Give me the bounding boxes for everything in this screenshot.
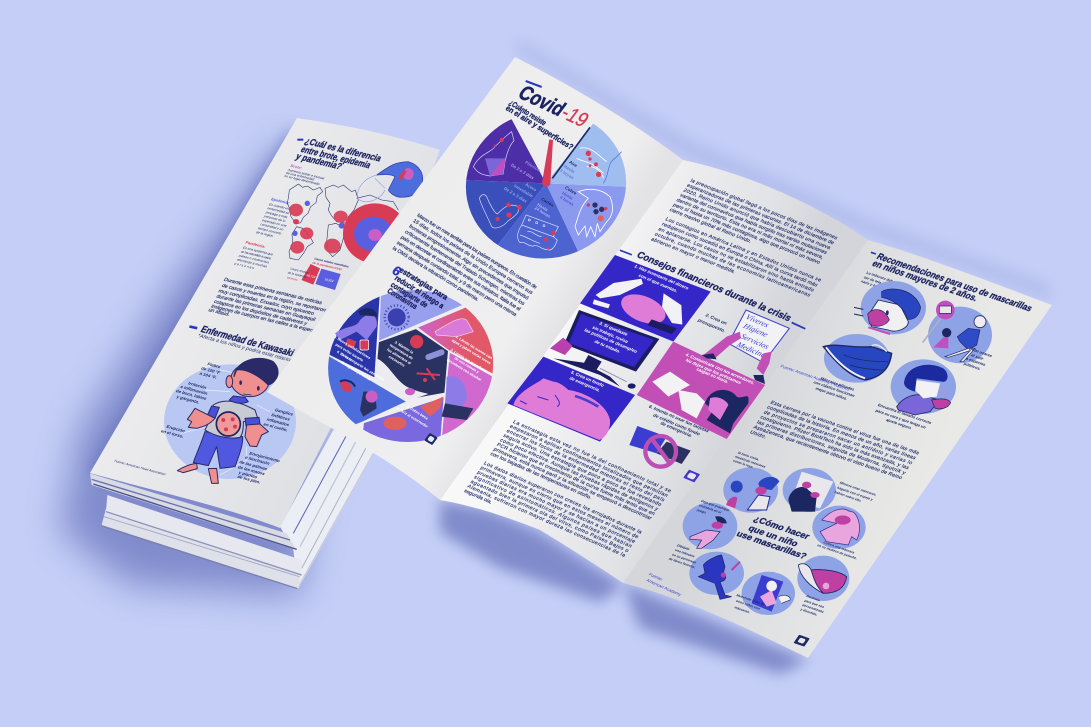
callout labels: y garganta. [176, 394, 200, 405]
subtitle: ¿Cuánto resiste [507, 98, 548, 128]
title bar [525, 80, 542, 88]
heading: que un niño [746, 523, 801, 548]
definitions: países o continentes [238, 254, 270, 264]
iris labels: 5. Cubre boca [406, 405, 430, 421]
caption: Coloca una máscara [822, 541, 855, 554]
bar chart [286, 257, 350, 290]
pie labels [503, 160, 579, 219]
pie labels: Acero [524, 182, 538, 193]
cell 4: 4. Comunícate con tus acreedores. [685, 352, 756, 385]
caption: Debe usarse [968, 346, 994, 358]
stack top pack [90, 473, 297, 550]
heading [735, 514, 812, 561]
panel: how to use masks [668, 451, 877, 647]
heading bar [297, 139, 303, 141]
source: Fuente: [648, 572, 664, 582]
text block: La estrategia esta vez no fue la del confinamiento total y se [512, 419, 672, 494]
text block: aguantado bien la primera ola del virus, como Países Bajos o [469, 479, 630, 554]
icon: child with mask [854, 281, 926, 334]
cell 6: 6. Intenta no usar tus tarjetas [648, 404, 711, 434]
text block [489, 419, 673, 526]
panel 3 text: consiguieron. Pfizer/ BioNTech ha sido la más avanzada, y las [759, 415, 911, 471]
caption: juego. [695, 508, 708, 515]
icon: hand with phone [442, 376, 473, 420]
caption: como la tuya. [732, 459, 755, 469]
cell 1 [580, 255, 711, 342]
subtitle: en el aire y superficies? [504, 104, 575, 151]
cell 2: presupuesto. [697, 318, 727, 333]
cell 2: Víveres [744, 313, 771, 329]
strategies heading: contagiarte de [389, 280, 430, 310]
cell 3: de tu estado. [593, 339, 622, 354]
panel 3 text: las primeras distribuciones, seguida de Moderna, Sputnik y [755, 420, 907, 476]
heading: ¿Cuál es la diferencia [302, 136, 384, 164]
caption: háganlo con el espejo y [836, 486, 874, 501]
caption: ser de tela y cubrir [863, 276, 896, 290]
pie labels: Hasta [561, 190, 575, 201]
icon: decorated mask [797, 556, 849, 601]
caption: máscaras. [733, 606, 751, 614]
iris labels: agua y jabón varias veces [451, 338, 492, 365]
iris labels: 4. Evita compartir tus utensilios [336, 350, 385, 382]
callout labels: de los pies. [236, 474, 262, 485]
callout labels: a 104 °F. [199, 371, 218, 380]
iris labels: 2. Limpia tus superficies [450, 348, 488, 374]
text block [207, 277, 327, 334]
cell 3 [550, 310, 659, 389]
definitions: comunidad y un [259, 222, 284, 231]
text block: como poco efectiva. Aunque las pruebas rápidas de antígenos y [498, 438, 660, 513]
strategies heading: reducir el riesgo a [393, 274, 446, 310]
caption: Mírense unas máscaras, [839, 481, 877, 497]
cell 2: Higiene [741, 321, 770, 339]
caption: una máscara [674, 548, 696, 558]
caption: nariz y boca [860, 280, 883, 290]
bar chart: Muertes [286, 276, 299, 282]
cell 5: 5. Crea un fondo [570, 370, 606, 388]
text block: la preocupación global llegó a los pocos días de las imágenes [689, 178, 839, 241]
definitions: esperado en una [261, 218, 288, 228]
icon: blue mask [823, 334, 892, 383]
stack of brochures [90, 430, 375, 589]
icon: girl fitting mask [891, 359, 956, 415]
icon: adult and child [923, 301, 992, 363]
subheading: *Afecta a los niños y podría estar relacionada [196, 333, 303, 366]
text block: pero sí hasta un 70% más contagiosa, algo que provocó un nuevo [671, 202, 821, 266]
caption: de libros favorito. [668, 557, 696, 569]
heading: Enfermedad de Kawasaki [198, 325, 296, 359]
text block: primavera, aunque es cierto que en estos meses el número de [479, 465, 640, 540]
callout labels: Fiebre [207, 362, 222, 369]
cell 2 [697, 310, 789, 384]
heading [293, 136, 384, 172]
heading: Recomendaciones para uso de mascarillas [874, 252, 1034, 314]
caption: para que sea [803, 599, 825, 609]
iris labels: desinfecta con alcohol [446, 358, 482, 382]
caption: Si tiene visita, [737, 451, 760, 461]
text block [668, 178, 839, 271]
caption: para su cara y que tenga un [875, 408, 928, 430]
text block: Durante esas primeras semanas de noticias [222, 277, 324, 306]
icon: child with mask sitting [683, 503, 737, 549]
caption [799, 594, 825, 617]
pointer [542, 139, 553, 187]
heading: ¿Cómo hacer [752, 514, 812, 541]
definitions: personas [233, 262, 255, 270]
callout labels: Erupción [165, 424, 186, 433]
body text: Marzo fue un mes terrible para los países europeos. En cuestión de [415, 213, 538, 291]
text block: octubre, cuando muchas de las economías latinoamericanas [653, 232, 812, 299]
rash [216, 412, 240, 436]
caption [668, 499, 731, 569]
text block: PCR hicieron que el crecimiento de la curva fuese más lento que en [495, 442, 656, 517]
caption: muéstrale máscaras [734, 455, 767, 469]
text block: colapsos en los depósitos de cadáveres y [212, 299, 309, 327]
text block: cierre masivo global al Reino Unido. [668, 207, 753, 245]
definitions: de una enfermedad [285, 171, 315, 181]
pie labels: 24 horas [533, 205, 552, 219]
icon: steel arm [479, 195, 522, 228]
title: Covid [514, 81, 570, 121]
text block: con los bajadas de las temperaturas en otoño. [489, 451, 593, 501]
pie labels: Hasta [563, 164, 576, 174]
callout labels: Irritación [187, 381, 208, 390]
heading: entre brote, epidemia [298, 145, 373, 171]
cell 4 [637, 342, 765, 439]
panel 3 text [748, 400, 921, 486]
source: Fuente: American Academy Pediatrics [779, 364, 851, 391]
world map [287, 184, 398, 260]
callout labels: de 100 °F [200, 366, 222, 375]
text block: empezaron a aplicar confinamientos localizados que permitían [508, 424, 669, 499]
map circles [289, 201, 407, 263]
cell 2: Medicinas [734, 340, 771, 361]
icon: person and mask [340, 380, 443, 430]
callout labels: y plantas [238, 470, 259, 479]
icon: copper hand [575, 189, 613, 237]
bar chart: de la pandemia H1N1 [311, 261, 343, 271]
icon: person with tissue [358, 162, 423, 202]
cell 2: Servicios [739, 332, 771, 351]
cell 6 [629, 404, 711, 467]
pie chart [466, 119, 626, 258]
iris labels: la cara [340, 353, 354, 362]
icon: woman [335, 308, 377, 350]
pie labels: 4 horas [559, 195, 575, 207]
heading: en niños mayores de 2 años. [870, 259, 980, 304]
icon: washing hands [435, 319, 473, 337]
heading [870, 252, 1034, 314]
strategies heading: 6 [389, 263, 404, 279]
body text: fronteras progresivamente. Algo sin precedentes que impulsó [407, 224, 530, 302]
callout labels: Ganglios [274, 407, 295, 417]
heading bar [189, 325, 198, 329]
definitions: de la región [255, 230, 274, 238]
iris labels: para evitar tocarte [335, 343, 364, 362]
body text [391, 213, 538, 324]
definitions [233, 163, 325, 270]
callout labels: en el torso. [160, 429, 185, 439]
text block: Los contagios en América Latina y en Estados Unidos nunca se [664, 217, 822, 283]
cell 6: de emergencia. [659, 421, 694, 438]
bar chart: Casos totales [289, 267, 310, 275]
heading bars [620, 249, 632, 256]
caption: en su muñeco de peluche. [816, 543, 858, 560]
cell 1: con el que cuentas. [638, 273, 679, 293]
pie labels: Plástico [524, 160, 541, 173]
definitions: Pandemia: [244, 240, 267, 249]
cell 3: las políticas de desempleo [583, 328, 639, 354]
icon: photo of child [742, 572, 795, 615]
iris labels: 6. Busca señalizaciones [333, 335, 371, 360]
caption: mejor para niños. [814, 386, 849, 401]
definitions: se ha extendido a varios [240, 250, 272, 260]
source: Fuente: American Heart Association [113, 459, 167, 476]
caption: usándola en el [698, 504, 722, 514]
text block: variante del coronavirus que había surgido tras varias mutaciones [678, 193, 829, 256]
back sheet [90, 118, 440, 528]
cell 2: 2. Crea un [704, 313, 728, 326]
caption: en su personaje [671, 553, 697, 564]
title number: -19 [556, 101, 594, 131]
text block: abrieron en mayor o menor medida. [650, 237, 737, 275]
pie labels: Aire [568, 160, 579, 168]
text block [462, 461, 643, 563]
pie labels: 3 horas [559, 168, 575, 180]
panel 3 text: de proyectos se prepararon sacar un antídoto y varias lo [762, 410, 914, 466]
caption: Decórala [805, 594, 821, 602]
text block: redujeron como sucedió en Europa o China. Allí la curva tardó más [660, 222, 819, 288]
definitions: Brote: [289, 163, 303, 170]
leader lines [182, 370, 270, 475]
callout labels: de las manos [237, 465, 266, 476]
iris labels: 1. Lávate las manos con [455, 335, 493, 360]
panel: Kawasaki [113, 325, 303, 485]
caption: La máscara debe [865, 271, 896, 284]
logo [683, 470, 700, 482]
bar chart: 20,723 [305, 273, 317, 279]
caption: Muéstrale fotos de [736, 593, 766, 606]
caption: Encuentra el tamaño correcto [877, 403, 933, 425]
panel: right panel [623, 240, 1052, 658]
iris labels: cocinarlos [388, 355, 406, 368]
pie labels: Hasta [536, 202, 550, 213]
panel: brote epidemia pandemia [207, 136, 423, 334]
panel: left panel [267, 57, 683, 500]
callout labels: de boca, labios [175, 388, 208, 401]
callout labels: e hinchazón [244, 455, 271, 466]
iris centre light patch [375, 358, 428, 401]
text block: de casos y muertes en la región, se reportaron [220, 283, 327, 313]
text block: Los datos diarios superaron con creces los arrojados durante la [482, 461, 643, 536]
title block [504, 80, 594, 151]
body text: semana después contando total, y 9 de marzo pero una misma [395, 240, 518, 318]
icon: plastic bag [473, 132, 514, 176]
callout labels [160, 362, 295, 485]
text block: en aplanarse. Los casos no se estabilizaron sino hasta entrado [657, 227, 815, 293]
definitions: Es cuando una [268, 202, 292, 211]
caption: con clástico funcionan [812, 380, 857, 398]
iris labels: los alimentos al [386, 348, 412, 365]
bar chart: Casos totales mundiales [313, 257, 350, 269]
pie wedges [466, 119, 626, 258]
panel: financial tips [507, 249, 806, 467]
caption: Dibújale [676, 544, 691, 551]
panel 3 text: Esta carrera por la vacuna contra el virus fue una de las más [769, 400, 921, 456]
iris labels: y nariz al estornudar [396, 407, 429, 429]
definitions: Epidemia: [270, 197, 291, 205]
text block: seguía activo. Una estrategia que poco a poco se fue revelando [502, 433, 663, 508]
iris labels: 3. Mantén la [394, 340, 415, 355]
cell 4: No dejes que los préstamos [685, 358, 743, 385]
iris labels: de higiene personal [340, 360, 371, 381]
definitions: propaga a más [265, 210, 289, 219]
text block: esperanzadoras de las primeras vacunas. El 14 de diciembre de [685, 183, 835, 246]
text block: significativo de asintomáticos. Algunos países que habían [472, 475, 633, 549]
definitions: tiempo concreto [257, 226, 282, 235]
icon: two people [723, 467, 779, 513]
panel 3 text: AstraZeneca, que recientemente obtuvo el visto bueno de Reino [752, 425, 903, 481]
definitions: afectando a muchas [236, 258, 268, 268]
callout labels: e inflamación [179, 384, 209, 396]
caption: Deja que practique [700, 499, 731, 512]
source: American Academy [645, 578, 683, 597]
definitions: Es una epidemia que [242, 246, 274, 256]
iris labels: temperatura de [389, 343, 414, 360]
icon: thermometer and syringe [405, 335, 445, 395]
caption [733, 593, 766, 614]
panel 2 top text [650, 178, 839, 304]
boy illustration [177, 358, 278, 483]
iris labels [333, 335, 493, 429]
text block: durante las primeras semanas en Guayaquil [215, 294, 316, 323]
panel: middle panel [440, 160, 868, 583]
definitions: en un lugar determinado [283, 174, 321, 186]
caption: públicos. [963, 361, 982, 371]
text block: Alemania, sufrieron con mayor dureza las consecuencias de la [466, 484, 627, 559]
icon: plush rabbit [812, 506, 866, 549]
heading: use mascarillas? [735, 529, 809, 561]
caption: personalizada [801, 603, 825, 614]
stack bottom pack [102, 508, 302, 588]
shadows [60, 40, 1050, 674]
caption: a espacios [965, 356, 988, 367]
text block: imágenes de cuerpos en las calles a la espera [210, 304, 316, 334]
strategies heading: Coronavirus [385, 286, 420, 311]
icon: superhero [689, 552, 744, 599]
heading: Consejos financieros durante la crisis [634, 250, 794, 324]
pie labels: inoxidable [513, 183, 535, 199]
text block: pruebas diarias era mucho mayor y se hacían a un porcentaje [476, 470, 636, 545]
cell 1: 1. Haz inventario del dinero [633, 264, 690, 291]
iris labels: de uso común y [454, 356, 480, 375]
pie labels: De 2 a 3 días [510, 163, 536, 181]
stack right edge [280, 430, 375, 588]
body text: críticamente fuertemente del Tratado Schengen, mientras los [403, 229, 526, 307]
panel 1 text and strategies [328, 213, 536, 445]
panel: mask recommendations [812, 252, 1034, 430]
caption: hablen sobre ello. [833, 490, 863, 503]
logo [424, 433, 438, 445]
circle background [164, 364, 296, 479]
callout labels: de las palmas [238, 460, 269, 471]
caption [860, 271, 896, 290]
caption: al salir [970, 353, 985, 361]
subtitle [504, 98, 575, 151]
callout labels: inflamados [266, 417, 291, 427]
cell 4: caigan en mora. [695, 367, 730, 384]
stack middle pack [106, 495, 302, 575]
logo [793, 635, 810, 647]
text block: encerrar los focos de la enfermedad mientras el resto del país [505, 429, 666, 503]
text block: primavera, está nunca paró y la situación se empeoró a descontrolar [492, 447, 653, 522]
heading: y pandemia? [293, 152, 344, 172]
pie labels: De 2 a 3 días [503, 186, 529, 204]
icon: air swirls [577, 148, 622, 183]
panel 3 text: complicadas de la historia. En menos de un año, varias líneas [765, 405, 917, 461]
cell 6: de crédito como fondo [652, 413, 701, 436]
text block: dentro de su territorio. Esta no era ni más mortal ni más severa, [675, 198, 825, 261]
strategies heading: estrategias para [397, 266, 450, 302]
text block: un ataúd. [207, 308, 231, 318]
bar chart: de la epidemia [287, 271, 308, 279]
definitions: personas de lo [263, 214, 287, 223]
pie divider [552, 127, 590, 178]
text block: segunda ola. [462, 488, 493, 505]
cell 5: de emergencia. [568, 376, 601, 393]
boy face [239, 380, 260, 395]
caption: y divertida. [799, 608, 818, 617]
caption: otros niños con [735, 599, 761, 611]
text block: muy complicadas. Ecuador, cuyo epicentro [217, 289, 315, 317]
pie labels: Cartón [540, 196, 555, 208]
caption [833, 481, 877, 503]
definitions: Aumento súbito e inusual [287, 168, 325, 180]
definitions: enfermedad se [266, 206, 290, 215]
body text: país en decretar el confinamiento entre sus ministros. Italia fue el [399, 235, 522, 312]
pie labels: Cobre [564, 185, 578, 196]
strategies heading [385, 263, 450, 311]
caption: ajuste seguro. [885, 417, 913, 430]
cell 3: 3. Si quedaste [598, 321, 629, 337]
icon: egg carton [518, 215, 558, 250]
heading bar [871, 252, 876, 255]
cell 5 [507, 357, 635, 442]
caption: Máscaras plisadas [819, 376, 856, 392]
body text: 15 días, todos los países de la Unión Europea cerraron sus [411, 218, 534, 296]
panel 2 bottom text [462, 419, 683, 597]
icon: mirror [783, 468, 836, 512]
text block: 2020, Reino Unido anunció que había descubierto una nueva [682, 188, 832, 251]
panel 3 text: Unido. [748, 430, 768, 440]
callout labels: linfáticos [270, 412, 292, 422]
icon: virus [385, 305, 409, 329]
callout labels: en el cuello. [263, 422, 289, 432]
callout labels: Enrojecimiento [248, 451, 281, 463]
caption [963, 346, 994, 371]
bar chart: 19,553 [323, 277, 335, 283]
body text: la OMS declara la situación como pandemia. [391, 246, 480, 303]
iris diagram [328, 290, 494, 442]
cell 3: sin trabajo, revisa [591, 325, 630, 344]
